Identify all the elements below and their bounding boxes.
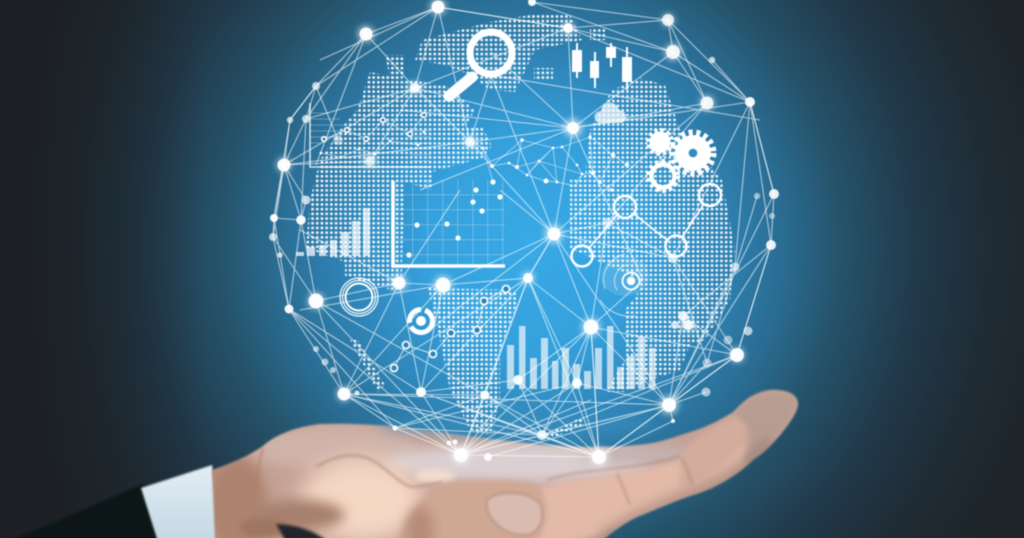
shirt cuff [141, 465, 225, 538]
upper-left line chart [310, 103, 431, 167]
palm and fingers [200, 380, 820, 538]
bright spot by thumb [415, 469, 455, 483]
thumb left shading [406, 506, 434, 538]
L-shaped axes chart [393, 181, 505, 266]
upper palm [250, 426, 420, 470]
icon: cloud [594, 103, 626, 123]
icon: small solid gear [648, 130, 672, 154]
skin base [200, 380, 820, 538]
network edges [273, 2, 774, 457]
radar ping [600, 254, 649, 316]
sleeve [0, 484, 160, 538]
thumb [395, 480, 546, 538]
second finger [680, 416, 748, 488]
network line chart [572, 184, 721, 266]
bright palm mound [300, 458, 424, 538]
lower finger edge shadow [603, 443, 773, 538]
lower bar chart [507, 326, 656, 389]
network nodes [269, 0, 779, 464]
fingertip [738, 394, 794, 450]
icon: large gear [673, 133, 713, 173]
icon: ring gear [648, 161, 678, 191]
grid panel [398, 180, 505, 266]
thumbnail [487, 493, 542, 535]
small inner nodes [406, 135, 629, 258]
pale palm area under globe [385, 443, 655, 483]
node glows [277, 0, 744, 466]
icon: candlestick chart [572, 43, 632, 90]
icon: magnifying glass [449, 32, 512, 96]
fold [242, 518, 284, 538]
donut chart icon [410, 310, 432, 332]
lower finger [530, 440, 745, 538]
finger joint crease [547, 456, 692, 505]
dotted continents [306, 15, 735, 438]
globe blue fading over palm [380, 413, 660, 437]
left bar chart [296, 208, 370, 256]
palm crease [257, 447, 442, 488]
lower line chart [390, 285, 510, 372]
fine inner network [470, 137, 627, 190]
concentric rings [340, 278, 378, 316]
hand [0, 380, 820, 538]
wrist shading [204, 455, 268, 538]
shade above palm fold [255, 500, 345, 530]
globe [269, 0, 779, 466]
